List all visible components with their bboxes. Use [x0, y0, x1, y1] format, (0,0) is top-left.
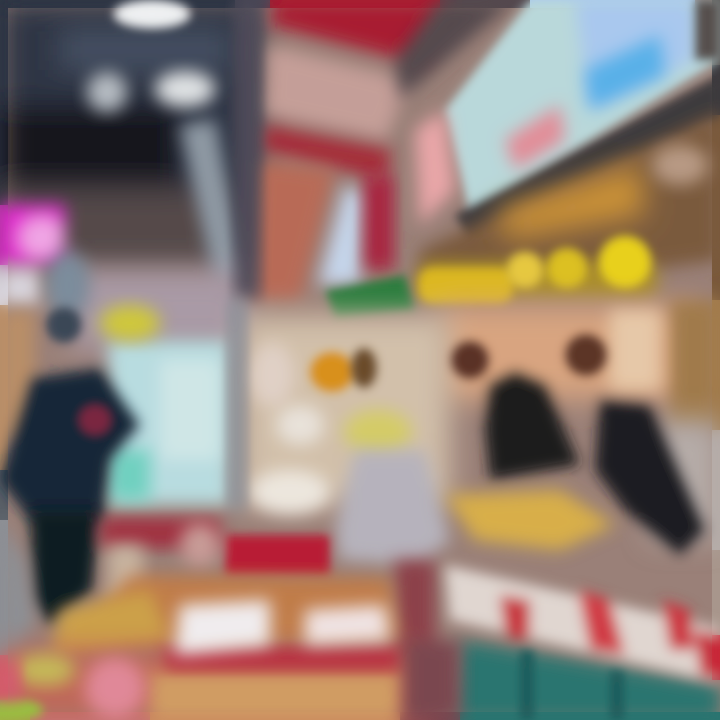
- upper right dark edge: [395, 0, 515, 100]
- two dark figures at right: [451, 334, 705, 555]
- peach shop interior: [440, 300, 720, 540]
- magenta neon sign: [0, 205, 65, 305]
- grey pavement at lower left: [0, 520, 35, 660]
- ceiling lights: [87, 0, 245, 285]
- yellow food tray: [445, 490, 615, 550]
- lower stall tables: [0, 575, 420, 720]
- teal base at lower right: [405, 640, 720, 720]
- yellow sign lights: [418, 236, 658, 304]
- background: dark ceiling at upper left: [0, 0, 260, 270]
- pale cyan shop panel: [108, 300, 246, 510]
- child in grey dress at centre: [335, 450, 450, 720]
- pink and green items at lower left: [0, 654, 145, 720]
- red and white striped edge: [445, 565, 720, 683]
- tan wall at left: [0, 310, 35, 440]
- red counter and goods: [100, 518, 330, 605]
- white trays: [175, 600, 390, 655]
- yellow label above panel: [100, 305, 160, 341]
- dark diagonal sign frame: [455, 75, 720, 240]
- large pale sign at upper right: [415, 0, 720, 225]
- brown storefront with orange signage: [420, 112, 720, 300]
- central building band behind stalls: [70, 270, 250, 350]
- red and pink hanging banners: [235, 0, 450, 300]
- green awning: [325, 275, 415, 318]
- central pale stall goods: [240, 315, 450, 514]
- person in dark jacket at left: [0, 251, 140, 625]
